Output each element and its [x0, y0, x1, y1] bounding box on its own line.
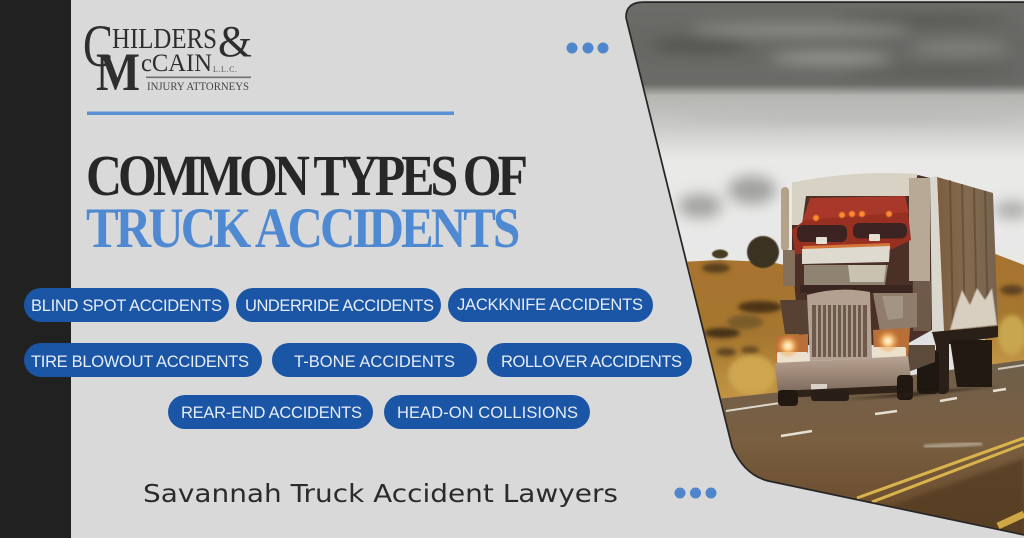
- tree: [747, 236, 779, 268]
- road: [721, 360, 1024, 534]
- mirrors: [816, 237, 827, 244]
- pill: rear-end: [168, 395, 373, 429]
- logo: Childers & McCain: cCAIN: [141, 50, 212, 77]
- road markings: [726, 403, 780, 411]
- pill: tire blowout: [24, 343, 262, 377]
- logo: Childers & McCain: C: [83, 13, 113, 79]
- divider line: [87, 112, 454, 115]
- logo: Childers & McCain: [83, 13, 252, 102]
- sun visor: [802, 246, 890, 264]
- hood side panels: [780, 300, 808, 334]
- pill: t-bone: T-BONE ACCIDENTS: [294, 353, 455, 371]
- trailer: [937, 177, 998, 332]
- pill: blind spot: [24, 288, 229, 322]
- marker lights: [813, 211, 892, 221]
- headlights: [776, 334, 808, 363]
- pill: rollover: [487, 343, 692, 377]
- windshield: [804, 265, 888, 285]
- pill: underride: UNDERRIDE ACCIDENTS: [245, 297, 434, 315]
- dots bottom: [674, 488, 716, 498]
- pill: head-on: [384, 395, 590, 429]
- pill: rollover: ROLLOVER ACCIDENTS: [501, 353, 682, 371]
- logo: Childers & McCain: &: [218, 17, 252, 66]
- windows: [797, 225, 847, 242]
- pill: underride: [236, 288, 441, 322]
- pill: jackknife: [448, 288, 653, 322]
- panel: truck photo: [620, 0, 1024, 538]
- dots top: [566, 42, 608, 54]
- logo: Childers & McCain: INJURY ATTORNEYS: [147, 79, 249, 93]
- cab fairing: [792, 174, 932, 345]
- pill: blind spot: BLIND SPOT ACCIDENTS: [31, 297, 222, 315]
- grille: [807, 290, 872, 361]
- pill: tire blowout: TIRE BLOWOUT ACCIDENTS: [31, 353, 249, 371]
- rear wheels: [950, 340, 992, 387]
- pill: t-bone: [272, 343, 477, 377]
- pill: jackknife: JACKKNIFE ACCIDENTS: [457, 296, 643, 314]
- accident type pills: [24, 288, 692, 429]
- red visor: [802, 196, 909, 222]
- hills: [680, 260, 800, 410]
- amber glow band: [803, 243, 890, 249]
- pill: head-on: HEAD-ON COLLISIONS: [397, 404, 578, 422]
- pill: rear-end: REAR-END ACCIDENTS: [181, 404, 362, 422]
- left dark sidebar: [0, 0, 71, 538]
- footer tagline: Savannah Truck Accident Lawyers: [143, 479, 618, 508]
- logo: Childers & McCain: L.L.C.: [213, 65, 237, 74]
- front wheels: [778, 390, 798, 406]
- heading: truck accidents: TRUCK ACCIDENTS: [86, 198, 520, 260]
- bumper: [775, 356, 911, 392]
- heading: common types of: COMMON TYPES OF: [86, 144, 528, 208]
- logo: Childers & McCain: M: [96, 42, 140, 102]
- logo: Childers & McCain: HILDERS: [112, 24, 217, 55]
